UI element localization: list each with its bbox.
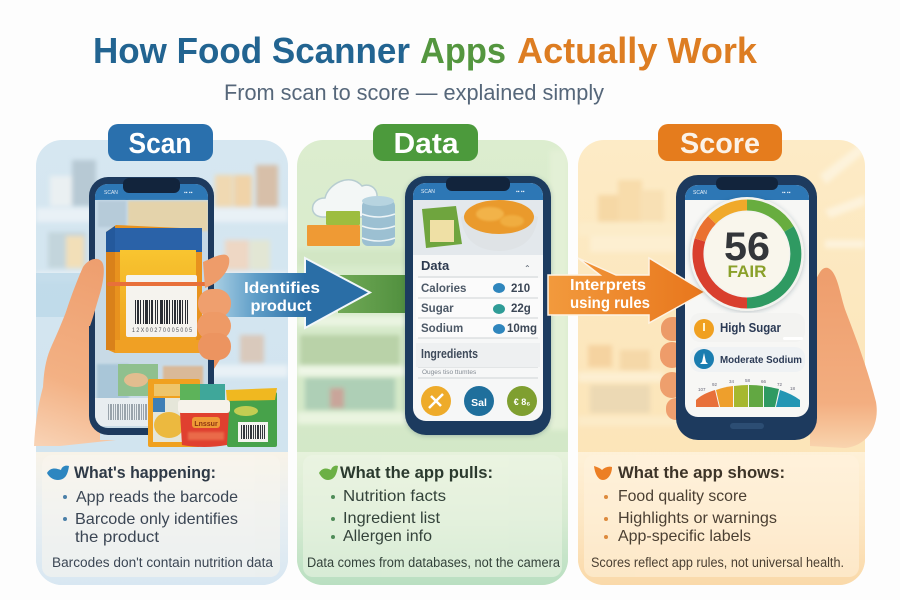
phone screen: score: SCAN [693, 190, 707, 196]
data table: Ouges tiso ttumtes [422, 369, 477, 376]
title: Actually Work [517, 30, 758, 71]
data table: Ingredients [421, 347, 478, 361]
notch [446, 177, 510, 191]
notch [716, 177, 778, 190]
panel: scan [36, 140, 288, 585]
score gauge: 56 [724, 225, 770, 269]
phone: scan [89, 177, 214, 435]
hand: score, behind phone [660, 268, 877, 448]
food image [413, 200, 543, 255]
text block: what the app shows: Food quality score [618, 488, 747, 505]
text block: what the app pulls [307, 463, 560, 570]
shelf background: data [297, 150, 568, 430]
icon: orange bird [594, 466, 612, 480]
pill: score: Score [680, 128, 760, 160]
score gauge: FAIR [728, 262, 766, 281]
arrow: interprets using rules: using rules [570, 295, 650, 312]
nutrition badges: € 8₆ [514, 397, 530, 407]
arrow: identifies product: Identifies [244, 280, 320, 297]
phone screen: score [685, 185, 809, 417]
text block: what's happening: Barcodes don't contain nutrition data [52, 555, 273, 570]
orange box [307, 225, 360, 246]
nutrition badges: Sal [471, 397, 487, 409]
shelf background: score [578, 140, 865, 426]
hand: scan thumb and fingers [62, 255, 231, 360]
phone screen: data: ▪▪ ▪▪ [516, 189, 525, 195]
data table: ⌃ [524, 264, 531, 273]
text block: what the app pulls: Ingredient list [343, 510, 441, 527]
data table: Sodium [421, 323, 463, 335]
score scale chart: 34 [729, 379, 735, 384]
database cylinders [362, 196, 395, 246]
score scale chart: 58 [745, 378, 751, 383]
data table: 22g [511, 303, 531, 315]
icon: green bird [319, 466, 338, 480]
heading: What the app pulls: [340, 463, 493, 482]
phone screen: scan: SCAN [104, 190, 118, 196]
text block: what the app pulls: Data comes from databases, not the camera [307, 555, 560, 570]
text block: what's happening: App reads the barcode [76, 489, 238, 506]
phone: score [676, 175, 817, 440]
subtitle: From scan to score — explained simply [224, 80, 604, 105]
phone: data [405, 176, 551, 435]
phone screen: scan [95, 184, 208, 428]
scan line [107, 282, 207, 286]
data table: Sugar [421, 303, 454, 315]
text block: what the app shows [591, 463, 844, 570]
title [93, 30, 758, 71]
score scale chart: 72 [777, 382, 783, 387]
pill: scan: Scan [128, 128, 192, 160]
warning: moderate sodium: Moderate Sodium [720, 354, 802, 366]
barcode label: 1 2 X 0 0 2 7 0 0 0 5 0 0 5 [132, 327, 192, 334]
arrow: identifies product [214, 258, 370, 328]
data table: Data [421, 258, 450, 273]
green tin [226, 388, 277, 447]
heading: What's happening: [74, 463, 216, 482]
title: Apps [420, 30, 506, 71]
warning: high sugar [690, 313, 805, 342]
inner text cards [42, 455, 859, 577]
data table [416, 258, 540, 378]
score scale chart: 18 [790, 386, 796, 391]
title: How Food Scanner [93, 30, 410, 71]
pill: scan [108, 124, 213, 161]
green band behind arrow [338, 275, 410, 313]
arrow: interprets using rules [548, 258, 705, 323]
database cloud illustration [307, 180, 395, 246]
icon: blue bird [47, 466, 69, 480]
home indicator [730, 423, 764, 429]
shelf background: scan [36, 160, 288, 377]
data table: 210 [511, 283, 530, 295]
score scale chart: 66 [761, 379, 767, 384]
text block: what the app shows: Scores reflect app rules, not universal health. [591, 555, 844, 570]
phone screen: data [413, 183, 543, 421]
notch [123, 178, 180, 193]
text block: what's happening: the product [75, 529, 160, 546]
cloud [313, 180, 377, 217]
data table: 10mg [507, 323, 537, 335]
arrow: identifies product: product [250, 298, 312, 315]
heading: What the app shows: [618, 463, 785, 482]
score scale chart [696, 378, 800, 407]
score gauge [690, 197, 804, 311]
text block: what the app pulls: Nutrition facts [343, 488, 446, 505]
green box [326, 211, 360, 225]
text block: what the app shows: App-specific labels [618, 528, 751, 545]
arrow: interprets using rules: Interprets [570, 277, 646, 294]
pill: score [658, 124, 782, 161]
text block: what's happening [47, 463, 273, 570]
score scale chart: 107 [698, 387, 706, 392]
hand: holding scan phone, back [34, 267, 226, 446]
text block: what the app shows: Highlights or warnings [618, 510, 777, 527]
cereal box with barcode [106, 225, 207, 353]
phone screen: data: SCAN [421, 189, 435, 195]
warning: moderate sodium [690, 347, 805, 372]
text block: what the app pulls: Allergen info [343, 528, 432, 545]
phone screen: scan: ▪▪ ▪▪ [184, 190, 193, 196]
text block: what's happening: Barcode only identifies [75, 511, 238, 528]
product group [148, 379, 277, 447]
panel: score [578, 140, 865, 585]
warning: high sugar: High Sugar [720, 321, 781, 335]
data table: Calories [421, 283, 466, 295]
pill: data [373, 124, 478, 161]
red tub: Lnssur [194, 421, 218, 428]
panel: data [297, 140, 568, 585]
nutrition badges [421, 386, 537, 416]
score scale chart: 92 [712, 382, 718, 387]
phone screen: score: ▪▪ ▪▪ [782, 190, 791, 196]
teal box [180, 384, 225, 400]
yellow box [148, 379, 200, 447]
pill: data: Data [394, 128, 459, 160]
